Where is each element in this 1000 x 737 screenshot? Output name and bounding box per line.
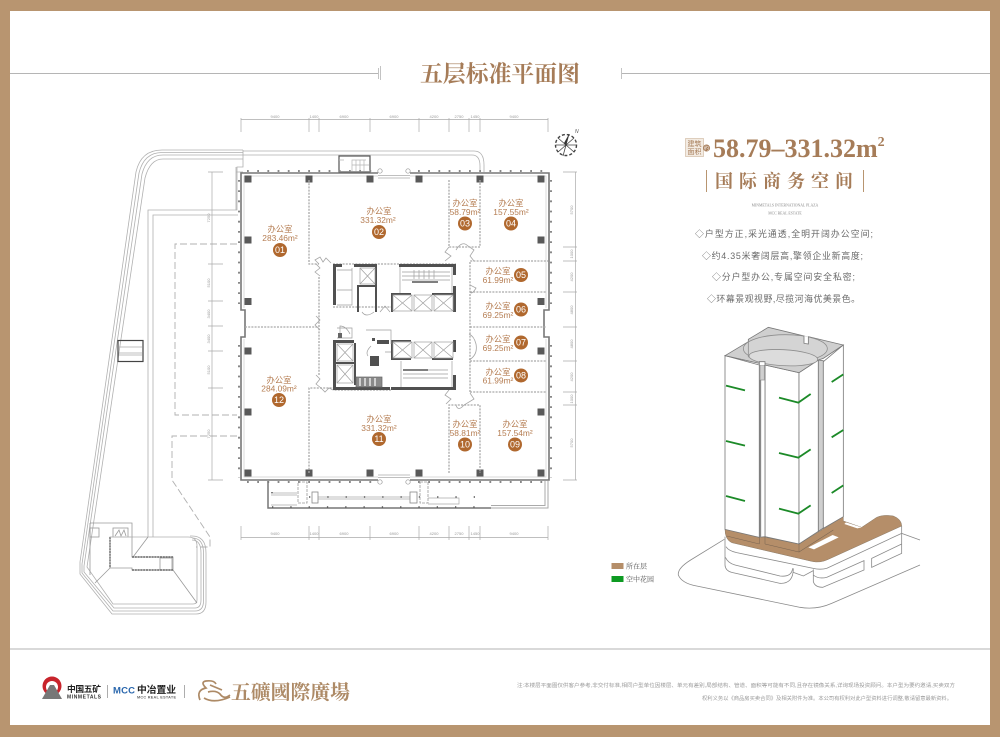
room 04: 办公室 (498, 198, 524, 208)
feature list: ◇户型方正,采光通透,全明开阔办公空间; (695, 228, 873, 239)
room 10 (450, 419, 481, 452)
room 09 (497, 419, 533, 452)
icon: dragon emblem (199, 681, 230, 701)
icon: compass: N (575, 129, 579, 135)
room 07: 69.25m² (483, 343, 514, 353)
stair block top (339, 156, 370, 172)
mcc logo (113, 683, 176, 700)
logo separator (108, 685, 184, 698)
ground and podium lines (678, 526, 920, 608)
legend (612, 562, 654, 584)
core fixtures upper (337, 267, 453, 315)
disclaimer (517, 681, 955, 702)
left dimension: 3400 (206, 334, 211, 343)
left dimension: 7250 (206, 213, 211, 222)
bottom dimension: 6900 (340, 531, 349, 536)
room 06: 69.25m² (483, 310, 514, 320)
room 12: 12 (274, 395, 284, 405)
terrace outline (80, 150, 484, 614)
right dimension: 5700 (569, 438, 574, 447)
room 03: 办公室 (452, 198, 478, 208)
disclaimer: 权利义务以《商品房买卖合同》及相关附件为准。本公司有权利对此户型资料进行调整,敬请留意最新资料。 (702, 694, 952, 702)
bottom dimension: 1400 (310, 531, 319, 536)
title: 五层标准平面图 (420, 62, 580, 86)
english caption: MCC REAL ESTATE (768, 212, 802, 216)
room 03: 58.79m² (450, 207, 481, 217)
room 07 (483, 334, 528, 353)
left dimension (206, 172, 223, 480)
core walls lower (333, 340, 456, 390)
top dimension: 9400 (271, 114, 280, 119)
facade mullions (239, 171, 551, 482)
building illustration (678, 327, 920, 608)
feature list: ◇约4.35米奢阔层高,擎领企业新高度; (702, 250, 863, 261)
core walls upper (333, 264, 456, 312)
feature list (695, 228, 873, 304)
area figure: 2 (878, 135, 885, 150)
left dimension: 3400 (206, 309, 211, 318)
icon: compass (556, 129, 579, 156)
bottom dimension: 2750 (455, 531, 464, 536)
bottom dimension: 9400 (271, 531, 280, 536)
room 04: 157.55m² (493, 207, 529, 217)
room 10: 10 (460, 440, 470, 450)
room 06 (483, 301, 528, 320)
top dimension: 1400 (310, 114, 319, 119)
room 10: 办公室 (452, 419, 478, 429)
room 12: 办公室 (266, 375, 292, 385)
room 12 (261, 375, 297, 407)
room 03: 03 (460, 219, 470, 229)
english caption: MINMETALS INTERNATIONAL PLAZA (752, 204, 819, 208)
room 08: 办公室 (485, 367, 511, 377)
bottom dimension: 4200 (430, 531, 439, 536)
mcc logo: MCC (113, 686, 135, 696)
top dimension (241, 114, 548, 132)
room 07: 办公室 (485, 334, 511, 344)
tower faces (725, 345, 843, 544)
left dimension: 5100 (206, 365, 211, 374)
roof pavilion (90, 523, 197, 603)
subtitle bars (706, 170, 864, 192)
floor plan (80, 114, 579, 614)
room 01: 01 (275, 245, 285, 255)
feature list: ◇环幕景观视野,尽揽河海优美景色。 (707, 293, 860, 304)
room 11: 11 (374, 434, 384, 444)
room 05 (483, 266, 528, 285)
right dimension: 1000 (569, 394, 574, 403)
top dimension: 9400 (510, 114, 519, 119)
project name calligraphy: 五礦國際廣場 (231, 681, 350, 704)
area label box (686, 138, 710, 156)
title rules (10, 66, 990, 80)
room 11: 办公室 (366, 414, 392, 424)
legend: 所在层 (626, 562, 647, 570)
area figure: 58.79–331.32m (713, 134, 878, 163)
room 02: 02 (374, 227, 384, 237)
bridge box (118, 340, 143, 362)
structural columns (244, 176, 544, 476)
room 01: 283.46m² (262, 233, 298, 243)
left dimension: 7250 (206, 429, 211, 438)
room 05: 05 (516, 270, 526, 280)
icon: minmetals emblem (42, 676, 62, 699)
right dimension: 4200 (569, 272, 574, 281)
right info panel (686, 134, 885, 304)
room 09: 办公室 (502, 419, 528, 429)
room 02: 331.32m² (360, 215, 396, 225)
office partitions (245, 180, 548, 473)
right dimension: 4800 (569, 305, 574, 314)
corridor doors (315, 244, 476, 408)
top dimension: 4200 (430, 114, 439, 119)
footer divider (10, 648, 990, 650)
area label box: 建筑 (688, 139, 702, 148)
core fixtures lower (337, 326, 453, 387)
brown current floor (725, 515, 902, 562)
top dimension: 1450 (471, 114, 480, 119)
room 04: 04 (506, 219, 516, 229)
tower translucent lower lines (727, 530, 833, 552)
english caption (752, 204, 819, 216)
podium strip (268, 481, 548, 508)
bottom dimension: 9400 (510, 531, 519, 536)
dashed zone outlines (172, 244, 237, 547)
left dimension: 5100 (206, 278, 211, 287)
room 09: 157.54m² (497, 428, 533, 438)
upper core (333, 264, 456, 315)
subtitle: 国际商务空间 (715, 170, 853, 192)
bottom dimension: 6900 (390, 531, 399, 536)
room 08: 08 (516, 371, 526, 381)
bottom dimension: 1450 (471, 531, 480, 536)
sky garden markers (726, 374, 843, 514)
feature list: ◇分户型办公,专属空间安全私密; (712, 271, 855, 282)
room 07: 07 (516, 338, 526, 348)
right dimension: 1000 (569, 249, 574, 258)
mcc logo: MCC REAL ESTATE (137, 696, 176, 700)
tower roof (725, 327, 843, 373)
podium roof holes (808, 522, 862, 549)
room 11 (361, 414, 397, 446)
disclaimer: 注:本楼层平面图仅供客户参考,非交付标准,相同户型单位因楼层、单元有差别,局部结构、管道、面积等可能有不同,且存在镜像关系,详询现场投资顾问。本户型为要约邀请,买卖双方 (517, 681, 955, 689)
minmetals logo (42, 676, 102, 700)
room 12: 284.09m² (261, 384, 297, 394)
room 06: 办公室 (485, 301, 511, 311)
right dimension: 4800 (569, 339, 574, 348)
bottom dimension (241, 526, 548, 540)
room 06: 06 (516, 305, 526, 315)
room 11: 331.32m² (361, 423, 397, 433)
room 05: 61.99m² (483, 275, 514, 285)
room 09: 09 (510, 440, 520, 450)
minmetals logo: 中国五矿 (67, 683, 101, 694)
lower core (333, 326, 456, 390)
area label box: 面积 (688, 147, 702, 156)
right dimension: 5700 (569, 205, 574, 214)
mcc logo: 中冶置业 (137, 683, 176, 696)
room 02 (360, 206, 396, 239)
right dimension: 4200 (569, 372, 574, 381)
top dimension: 2750 (455, 114, 464, 119)
room 05: 办公室 (485, 266, 511, 276)
legend: 空中花园 (626, 574, 654, 584)
room 01: 办公室 (267, 224, 293, 234)
top dimension: 6900 (340, 114, 349, 119)
room 03 (450, 198, 481, 230)
room 08 (483, 367, 528, 386)
room 02: 办公室 (366, 206, 392, 216)
room 01 (262, 224, 298, 257)
building walls (241, 169, 549, 484)
room 04 (493, 198, 529, 230)
room 08: 61.99m² (483, 376, 514, 386)
right dimension (563, 172, 577, 480)
minmetals logo: MINMETALS (67, 694, 102, 700)
room 10: 58.81m² (450, 428, 481, 438)
area label box: 约 (704, 145, 709, 152)
top dimension: 6900 (390, 114, 399, 119)
